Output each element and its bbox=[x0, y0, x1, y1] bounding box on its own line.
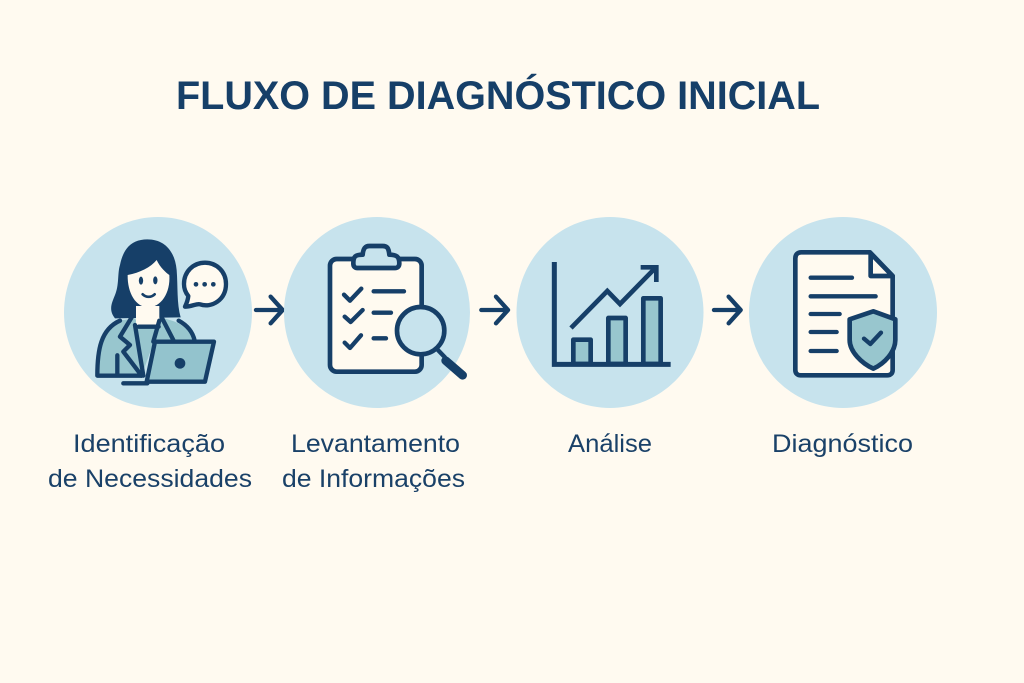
icon: woman with laptop and speech bubble bbox=[97, 239, 226, 383]
label 1: Identificação bbox=[73, 430, 225, 458]
step 1: Identificação de Necessidades bbox=[48, 217, 252, 493]
arrow 2 bbox=[481, 297, 508, 323]
step 4: Diagnóstico bbox=[749, 217, 937, 458]
label 2: Levantamento bbox=[291, 430, 460, 458]
step 3: Análise bbox=[516, 217, 704, 458]
circle 2 bbox=[284, 217, 470, 408]
label 1: de Necessidades bbox=[48, 465, 252, 493]
step 2: Levantamento de Informações bbox=[282, 217, 470, 493]
arrow 1 bbox=[256, 297, 283, 323]
label 4: Diagnóstico bbox=[772, 430, 913, 458]
icon: clipboard and magnifier bbox=[330, 246, 463, 375]
icon: document with shield bbox=[795, 252, 895, 375]
label 2 bbox=[282, 430, 465, 493]
circle 4 bbox=[749, 217, 937, 408]
icon: bar chart with rising arrow bbox=[554, 262, 671, 364]
circle 1 bbox=[64, 217, 252, 408]
title: FLUXO DE DIAGNÓSTICO INICIAL bbox=[176, 72, 820, 118]
circle 3 bbox=[516, 217, 704, 408]
label 3: Análise bbox=[568, 430, 652, 458]
label 2: de Informações bbox=[282, 465, 465, 493]
label 1 bbox=[48, 430, 252, 493]
arrow 3 bbox=[714, 297, 741, 323]
